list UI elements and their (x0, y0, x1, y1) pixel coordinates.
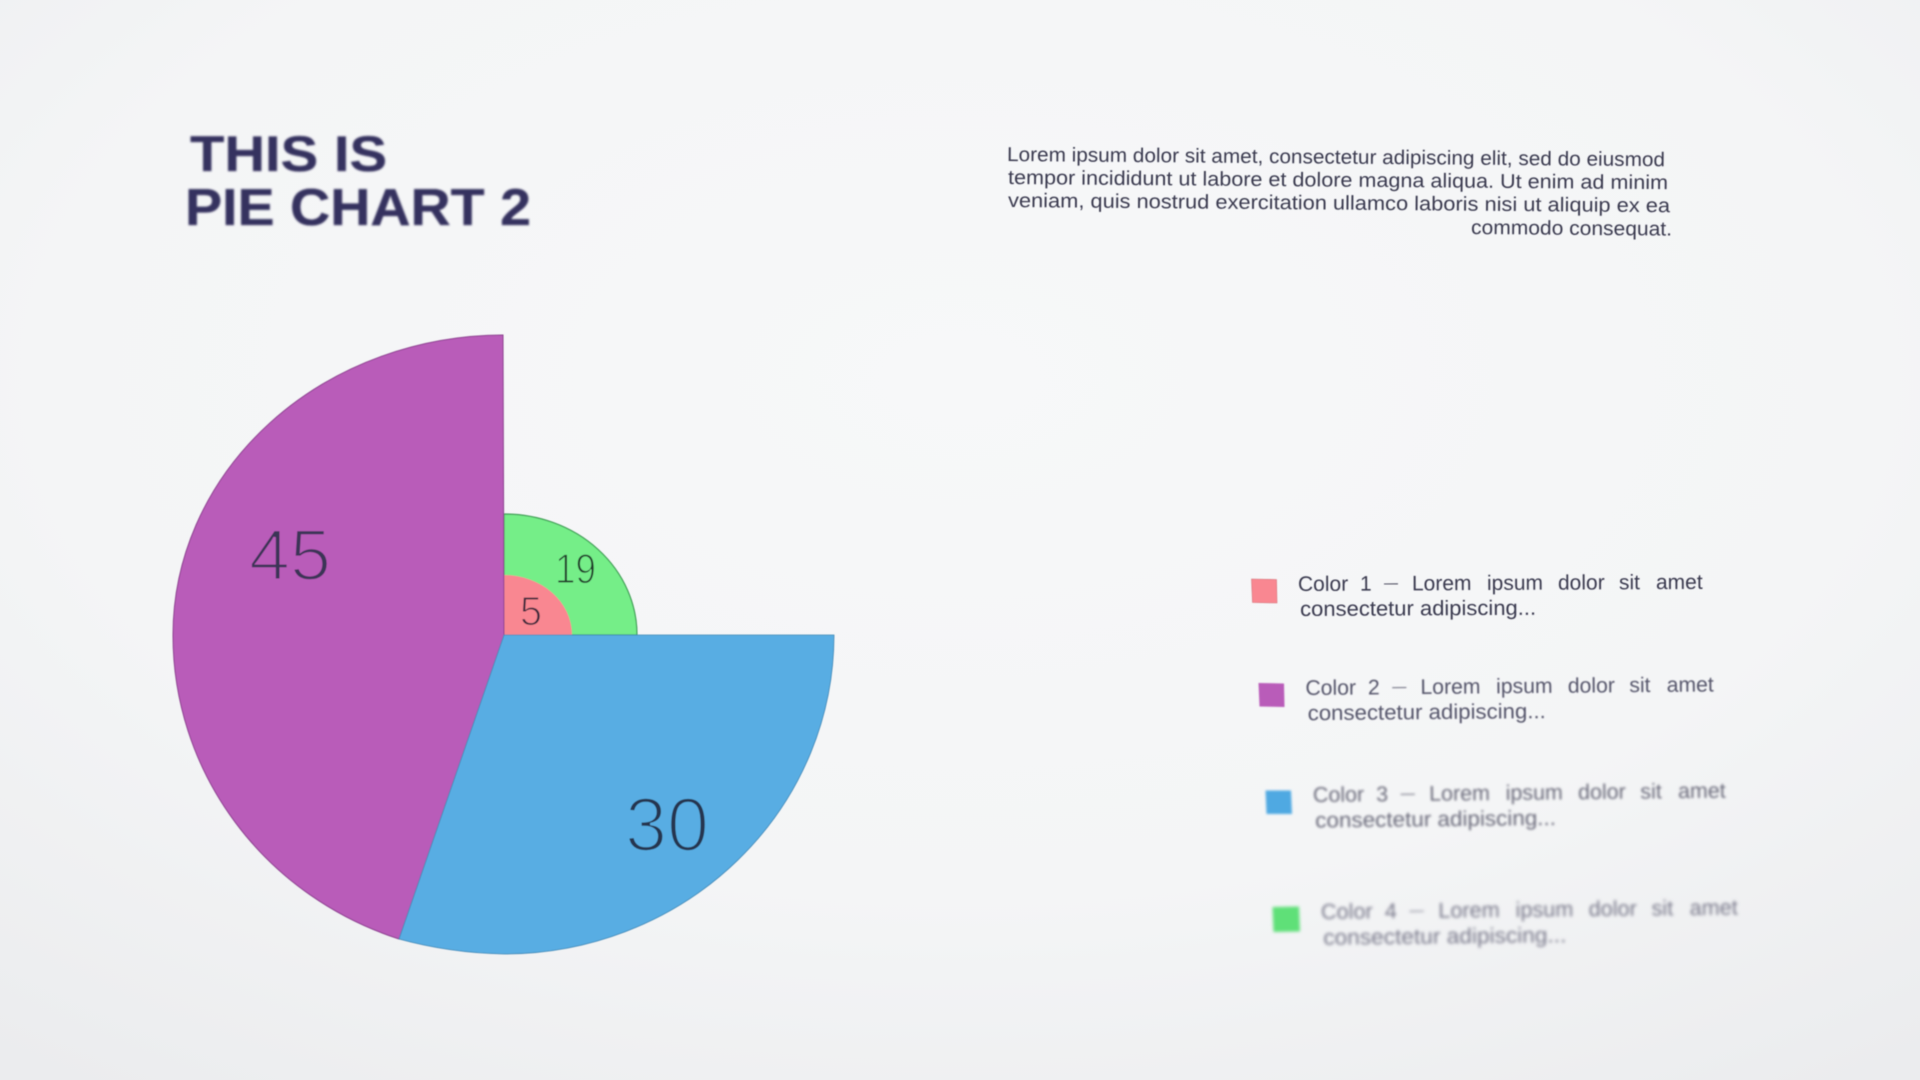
slice: color 4 green, 19 (504, 514, 637, 635)
legend text 3: Color (1313, 782, 1370, 807)
legend text 1 (1298, 571, 1703, 621)
swatch: blue (1266, 790, 1292, 814)
description paragraph: veniam, quis nostrud exercitation ullamco laboris nisi ut aliquip ex ea (1008, 190, 1671, 217)
legend text 2: dolor (1568, 674, 1621, 698)
legend (1252, 571, 1738, 950)
title (185, 126, 531, 237)
legend text 2: consectetur adipiscing... (1308, 700, 1546, 725)
description paragraph (1007, 144, 1672, 241)
legend text 2: sit (1629, 674, 1656, 697)
title: PIE CHART 2 (185, 179, 531, 237)
legend text 2: 2 (1368, 676, 1386, 699)
legend item: color 2 (1258, 673, 1714, 725)
legend text 4: Lorem (1438, 897, 1506, 923)
legend text 1: amet (1656, 571, 1703, 594)
legend text 2: ipsum (1496, 675, 1559, 698)
description paragraph: Lorem ipsum dolor sit amet, consectetur adipiscing elit, sed do eiusmod (1007, 144, 1665, 171)
legend text 3: Lorem (1429, 781, 1496, 806)
legend text 4: — (1409, 903, 1428, 919)
legend text 2: Color (1305, 677, 1362, 700)
legend text 1: — (1384, 574, 1402, 591)
label: 30: 30 (625, 783, 709, 868)
legend text 4: ipsum (1515, 896, 1579, 922)
pie chart (173, 335, 834, 954)
legend item: color 3 (1266, 779, 1726, 832)
legend text 4: sit (1651, 895, 1679, 921)
swatch: green (1272, 906, 1300, 932)
legend text 4: Color (1321, 898, 1379, 924)
legend item: color 1 (1252, 571, 1703, 621)
legend text 1: dolor (1558, 571, 1611, 595)
slice: color 2 purple, 45 (173, 335, 504, 939)
legend text 1: sit (1619, 571, 1646, 594)
legend text 3: 3 (1376, 782, 1394, 806)
legend text 3 (1313, 779, 1726, 832)
title: THIS IS (190, 126, 387, 182)
swatch: purple (1258, 683, 1284, 707)
label: 5: 5 (520, 588, 542, 634)
legend text 3: sit (1640, 779, 1668, 804)
legend text 3: dolor (1578, 780, 1632, 804)
legend text 3: ipsum (1506, 780, 1569, 805)
legend text 4: consectetur adipiscing... (1323, 922, 1566, 950)
legend item: color 4 (1272, 895, 1738, 950)
legend text 2: Lorem (1420, 675, 1486, 699)
label: 45: 45 (249, 516, 331, 596)
legend text 4: amet (1690, 895, 1738, 920)
legend text 3: amet (1678, 779, 1726, 803)
description paragraph: commodo consequat. (1471, 217, 1672, 241)
legend text 1: ipsum (1487, 572, 1549, 595)
legend text 1: consectetur adipiscing... (1300, 597, 1536, 621)
legend text 4: dolor (1589, 896, 1643, 921)
legend text 2 (1305, 673, 1714, 725)
label: 19: 19 (555, 545, 596, 592)
legend text 4: 4 (1385, 898, 1403, 923)
legend text 4 (1321, 895, 1738, 950)
legend text 2: amet (1667, 673, 1714, 697)
swatch: pink (1252, 579, 1277, 603)
legend text 3: consectetur adipiscing... (1315, 806, 1556, 832)
slice: color 1 pink, 5 (504, 575, 572, 635)
slice: color 3 blue, 30 (399, 635, 834, 954)
legend text 1: Lorem (1412, 572, 1477, 595)
legend text 1: 1 (1360, 573, 1378, 596)
legend text 3: — (1401, 786, 1419, 802)
description paragraph: tempor incididunt ut labore et dolore magna aliqua. Ut enim ad minim (1008, 167, 1668, 194)
legend text 2: — (1392, 678, 1410, 694)
legend text 1: Color (1298, 573, 1354, 596)
